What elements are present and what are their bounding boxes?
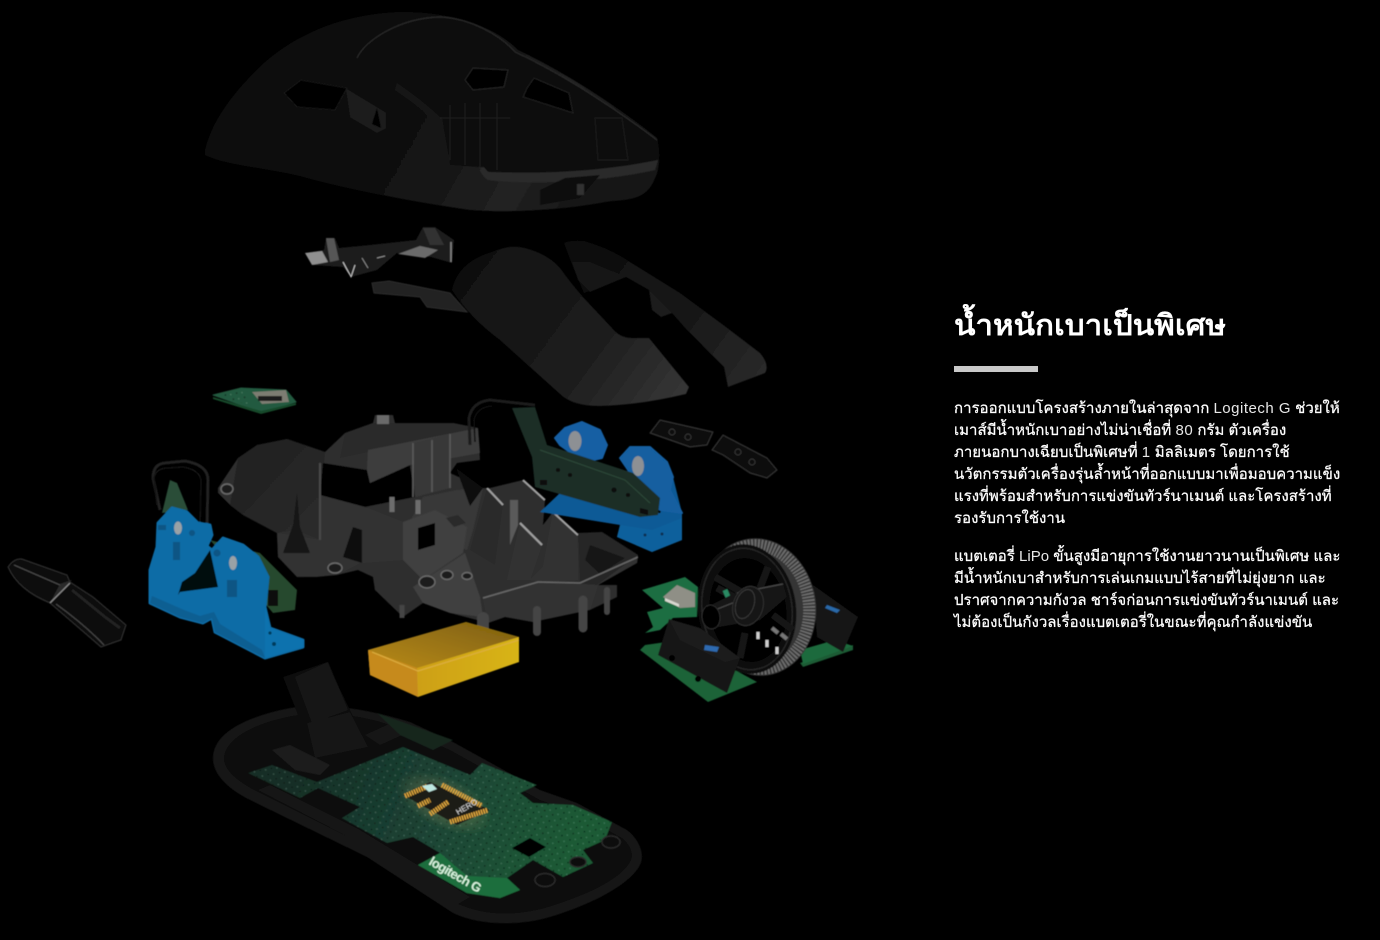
- heading: น้ำหนักเบาเป็นพิเศษ: [954, 310, 1226, 342]
- central chassis frame: [218, 415, 638, 633]
- left switch board: [642, 577, 698, 633]
- lithium battery: [368, 622, 519, 697]
- case screw posts: [535, 836, 620, 894]
- paragraph: battery: มีน้ำหนักเบาสำหรับการเล่นเกมแบบไร้สายที่ไม่ยุ่งยาก และ: [954, 570, 1326, 587]
- base plate: [413, 553, 483, 617]
- paragraph: battery: [952, 544, 1340, 632]
- left wing wall: [230, 439, 325, 540]
- exploded mouse illustration: [7, 12, 858, 924]
- scroll wheel assembly: [640, 531, 858, 702]
- paragraph: construction: ภายนอกบางเฉียบเป็นพิเศษที่ 1 มิลลิเมตร โดยการใช้: [954, 444, 1290, 461]
- left wires and green flex: [153, 461, 297, 613]
- lever bracket: [372, 281, 467, 312]
- paragraph: construction: รองรับการใช้งาน: [954, 510, 1065, 527]
- right switch board: [800, 645, 853, 667]
- small grey internal bracket: [305, 227, 454, 277]
- heading rule: [954, 366, 1038, 372]
- chassis fins: [470, 488, 503, 565]
- small black chain clips: [650, 420, 777, 478]
- paragraph: construction: [954, 399, 1340, 527]
- paragraph: construction: นวัตกรรมตัวเครื่องรุ่นล้ำหน้าที่ออกแบบมาเพื่อมอบความแข็ง: [954, 466, 1340, 483]
- paragraph: battery: แบตเตอรี่ LiPo ขั้นสูงมีอายุการใช้งานยาวนานเป็นพิเศษ และ: [954, 548, 1340, 565]
- small circuit board: [213, 388, 296, 414]
- top shell: [205, 12, 659, 211]
- paragraph: construction: แรงที่พร้อมสำหรับการแข่งขันทัวร์นาเมนต์ และโครงสร้างที่: [954, 488, 1332, 505]
- right button strip: [564, 241, 767, 387]
- sensor chip: [403, 782, 490, 825]
- right blue suspension part: [540, 422, 682, 552]
- main button plate: [452, 247, 689, 406]
- blue left suspension part: [150, 508, 303, 658]
- paragraph: battery: ปราศจากความกังวล ชาร์จก่อนการแข่งขันทัวร์นาเมนต์ และ: [954, 592, 1339, 609]
- bottom case with skate and sensor board: [213, 662, 642, 923]
- paragraph: battery: ไม่ต้องเป็นกังวลเรื่องแบตเตอรี่ในขณะที่คุณกำลังแข่งขัน: [954, 614, 1312, 631]
- main circuit board: [248, 747, 612, 898]
- left side button: [8, 559, 126, 647]
- chassis inner void: [320, 463, 415, 507]
- front switch: [658, 619, 740, 693]
- sensor chip: HERO: [454, 797, 479, 817]
- chassis pegs: [483, 590, 607, 632]
- text column: [952, 304, 1340, 632]
- paragraph: construction: เมาส์มีน้ำหนักเบาอย่างไม่น่าเชื่อที่ 80 กรัม ตัวเครื่อง: [954, 422, 1286, 439]
- logitech g logo: logitech G: [426, 854, 484, 896]
- dark green flex strip: [469, 400, 660, 517]
- paragraph: construction: การออกแบบโครงสร้างภายในล่าสุดจาก Logitech G ช่วยให้: [954, 400, 1340, 417]
